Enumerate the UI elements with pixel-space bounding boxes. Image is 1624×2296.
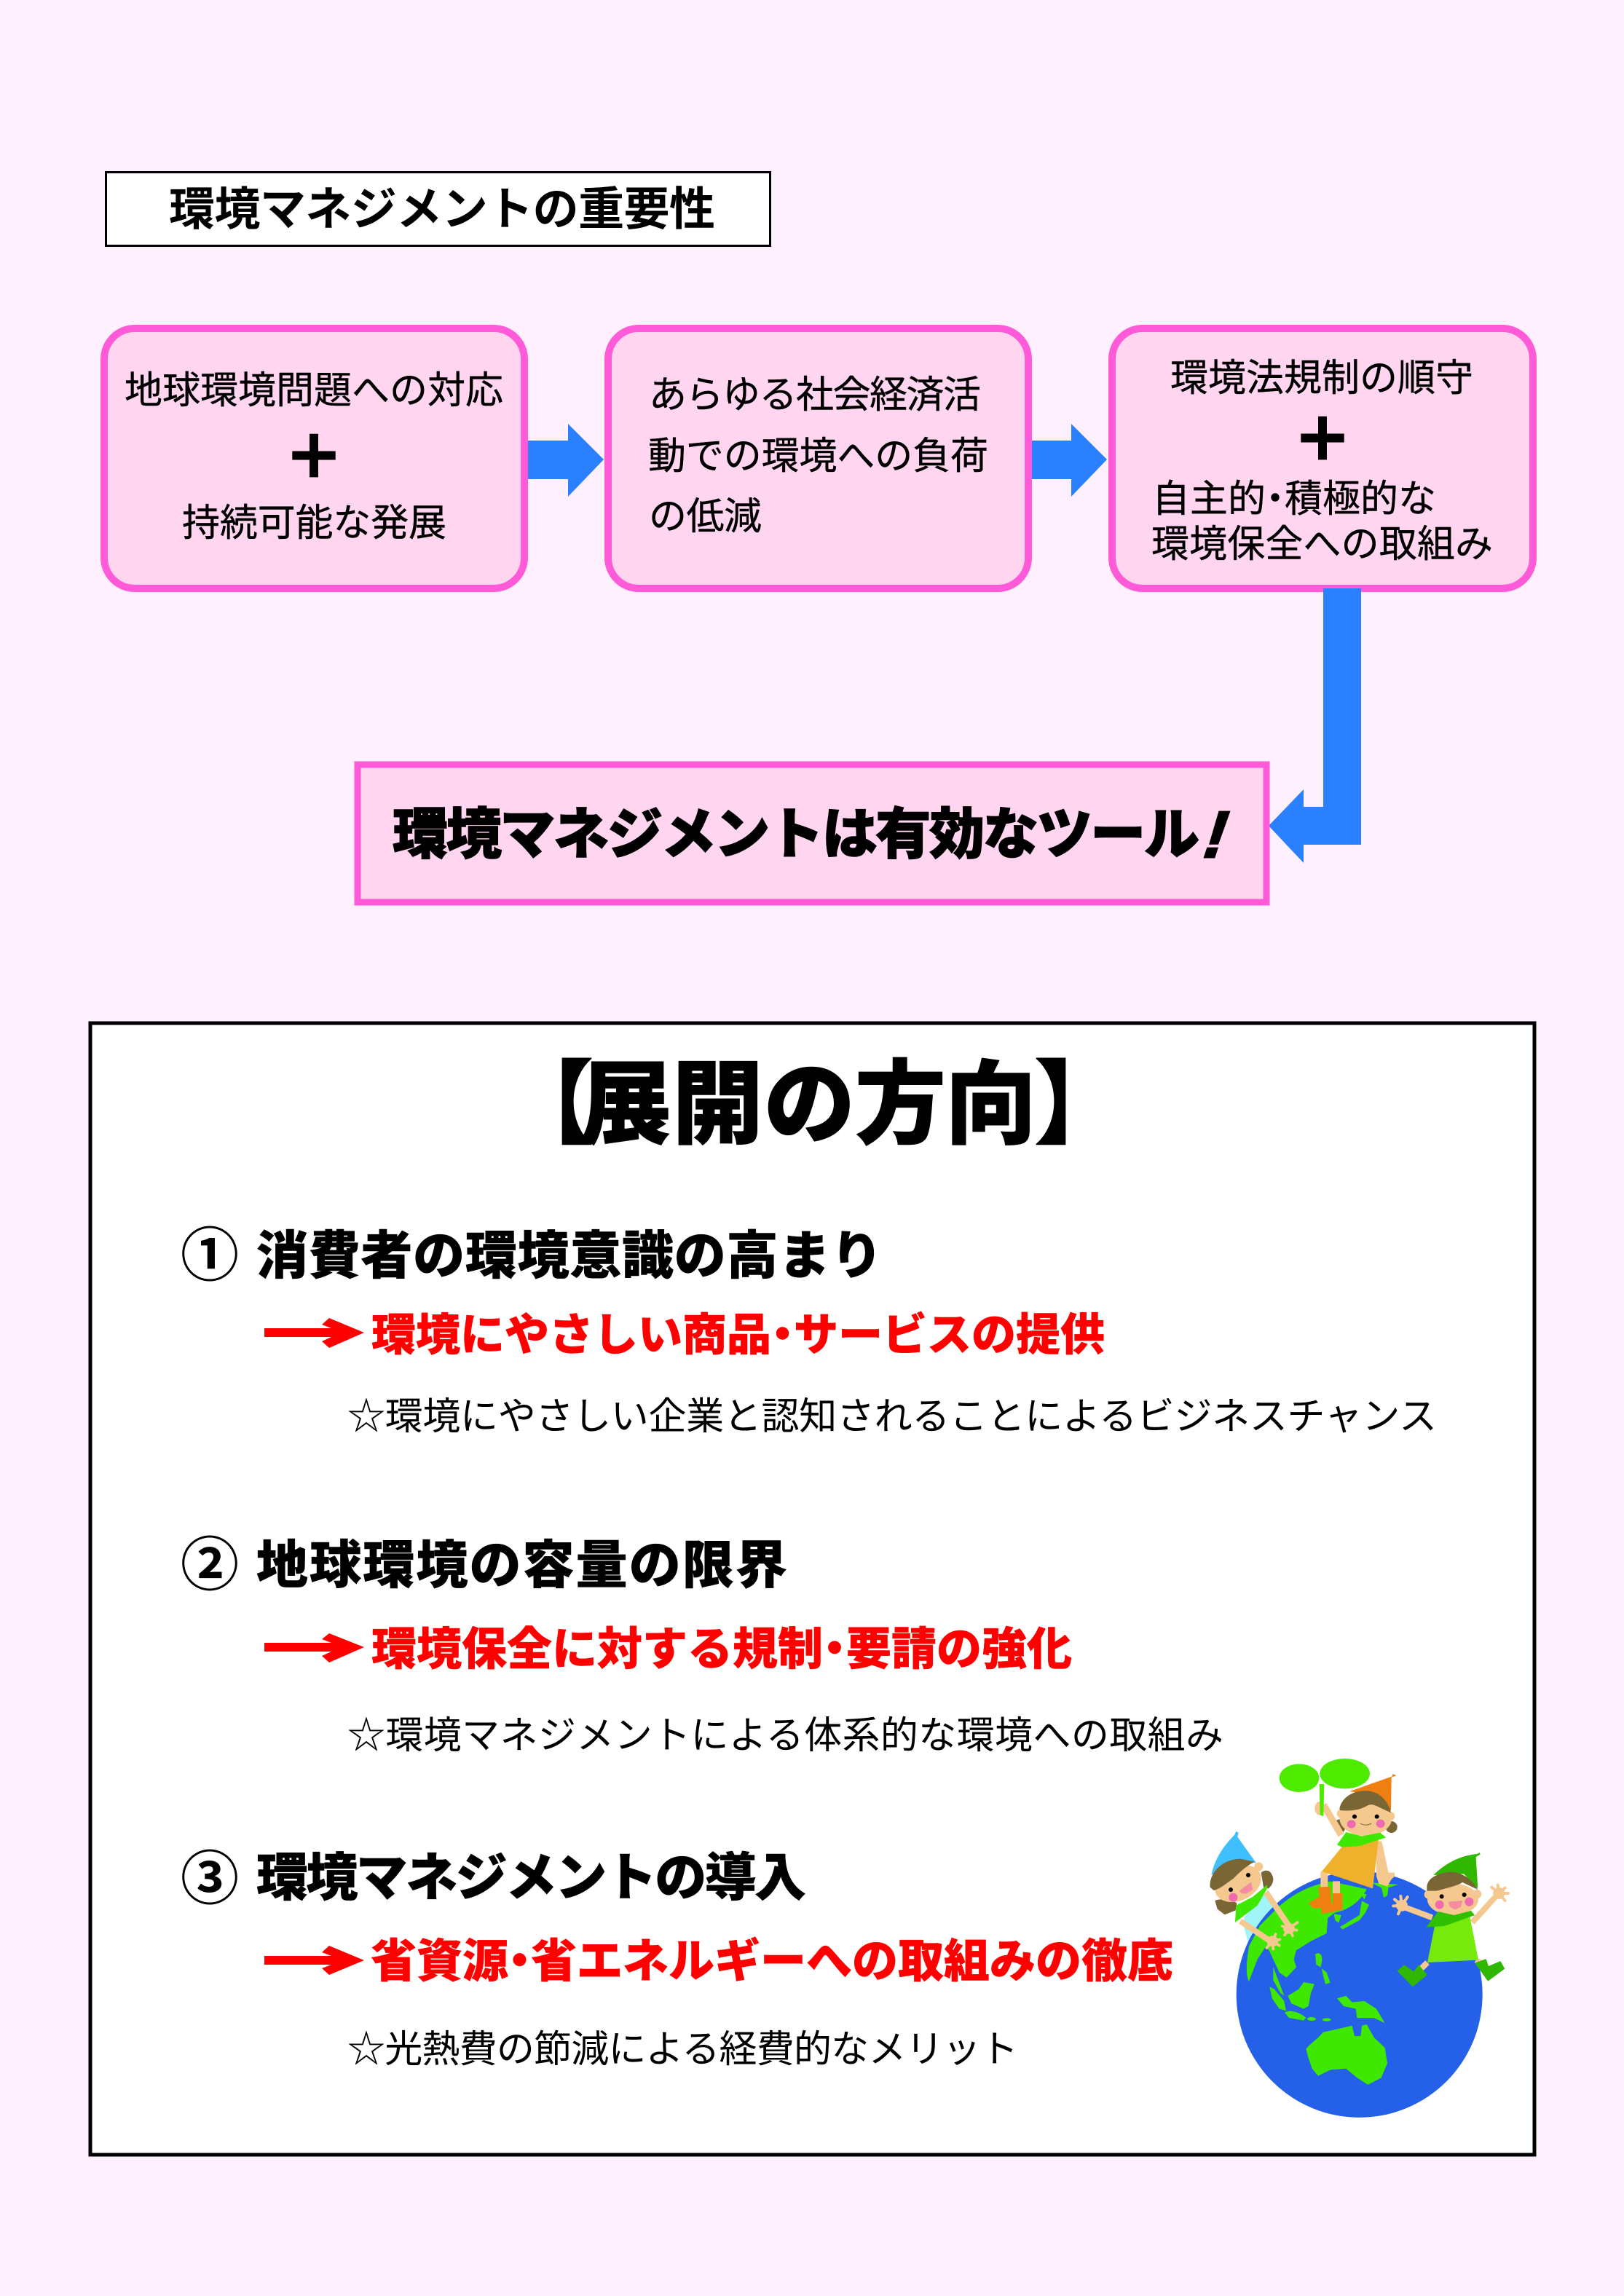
character: left child in blue hat xyxy=(1209,1831,1298,1949)
arrow: section 3 red xyxy=(264,1946,364,1975)
heading: section 2: ② xyxy=(181,1533,239,1598)
character: center child with sprout xyxy=(1280,1759,1398,1914)
heading: section 1: 消費者の環境意識の高まり xyxy=(256,1228,883,1285)
heading: section 3: 環境マネジメントの導入 xyxy=(256,1850,806,1907)
arrow: section 1 red xyxy=(264,1318,364,1348)
text: section 2 result: 環境保全に対する規制・要請の強化 xyxy=(371,1625,1072,1675)
panel: reducing environmental load: 動での環境への負荷 xyxy=(648,435,988,478)
section 3: introducing environmental management xyxy=(181,1847,1173,2071)
left child dress behind globe xyxy=(1244,1892,1274,1946)
section 1: consumer awareness xyxy=(181,1223,1437,1438)
heading: direction of development: 【展開の方向】 xyxy=(502,1054,1125,1156)
illustration: three children on the globe xyxy=(1209,1759,1508,2118)
text: section 1 note: ☆環境にやさしい企業と認知されることによるビジネスチャンス xyxy=(347,1396,1437,1438)
section 2: limits of environmental capacity xyxy=(181,1533,1223,1757)
callout: environmental management is an effective tool xyxy=(358,765,1266,902)
panel: global issues and sustainable development: ＋ xyxy=(285,425,342,489)
text: section 1 result: 環境にやさしい商品・サービスの提供 xyxy=(371,1310,1105,1360)
title: importance of environmental management xyxy=(106,172,770,246)
text: section 3 result: 省資源・省エネルギーへの取組みの徹底 xyxy=(371,1936,1173,1987)
panel: direction of development xyxy=(90,1023,1534,2155)
panel: global issues and sustainable development xyxy=(104,328,524,588)
heading: section 1: ① xyxy=(181,1223,239,1288)
panel: global issues and sustainable development: 持続可能な発展 xyxy=(182,502,446,545)
panel: compliance and voluntary efforts: ＋ xyxy=(1294,408,1351,472)
title: importance of environmental management: 環境マネジメントの重要性 xyxy=(169,184,715,235)
callout: environmental management is an effective tool: ! xyxy=(1194,797,1240,871)
panel: reducing environmental load xyxy=(608,328,1028,588)
panel: compliance and voluntary efforts: 環境法規制の順守 xyxy=(1170,358,1473,400)
panel: global issues and sustainable development: 地球環境問題への対応 xyxy=(125,370,503,412)
panel: reducing environmental load: あらゆる社会経済活 xyxy=(649,374,981,417)
heading: section 2: 地球環境の容量の限界 xyxy=(256,1537,787,1595)
text: section 3 note: ☆光熱費の節減による経費的なメリット xyxy=(347,2029,1018,2071)
arrow: section 2 red xyxy=(264,1633,364,1662)
text: section 2 note: ☆環境マネジメントによる体系的な環境への取組み xyxy=(347,1715,1223,1757)
panel: compliance and voluntary efforts: 自主的・積極的な xyxy=(1152,478,1436,521)
panel: compliance and voluntary efforts: 環境保全への取組み xyxy=(1151,524,1493,566)
panel: reducing environmental load: の低減 xyxy=(649,496,762,538)
heading: section 3: ③ xyxy=(181,1847,239,1912)
character: right child in green hat xyxy=(1393,1853,1508,1986)
icon: globe xyxy=(1237,1871,1483,2118)
arrow: box one to box two xyxy=(528,424,604,497)
panel: compliance and voluntary efforts xyxy=(1112,328,1533,588)
arrow: box two to box three xyxy=(1032,424,1107,497)
callout: environmental management is an effective tool: 環境マネジメントは有効なツール xyxy=(393,804,1199,866)
arrow: elbow from box three to conclusion xyxy=(1269,588,1361,863)
